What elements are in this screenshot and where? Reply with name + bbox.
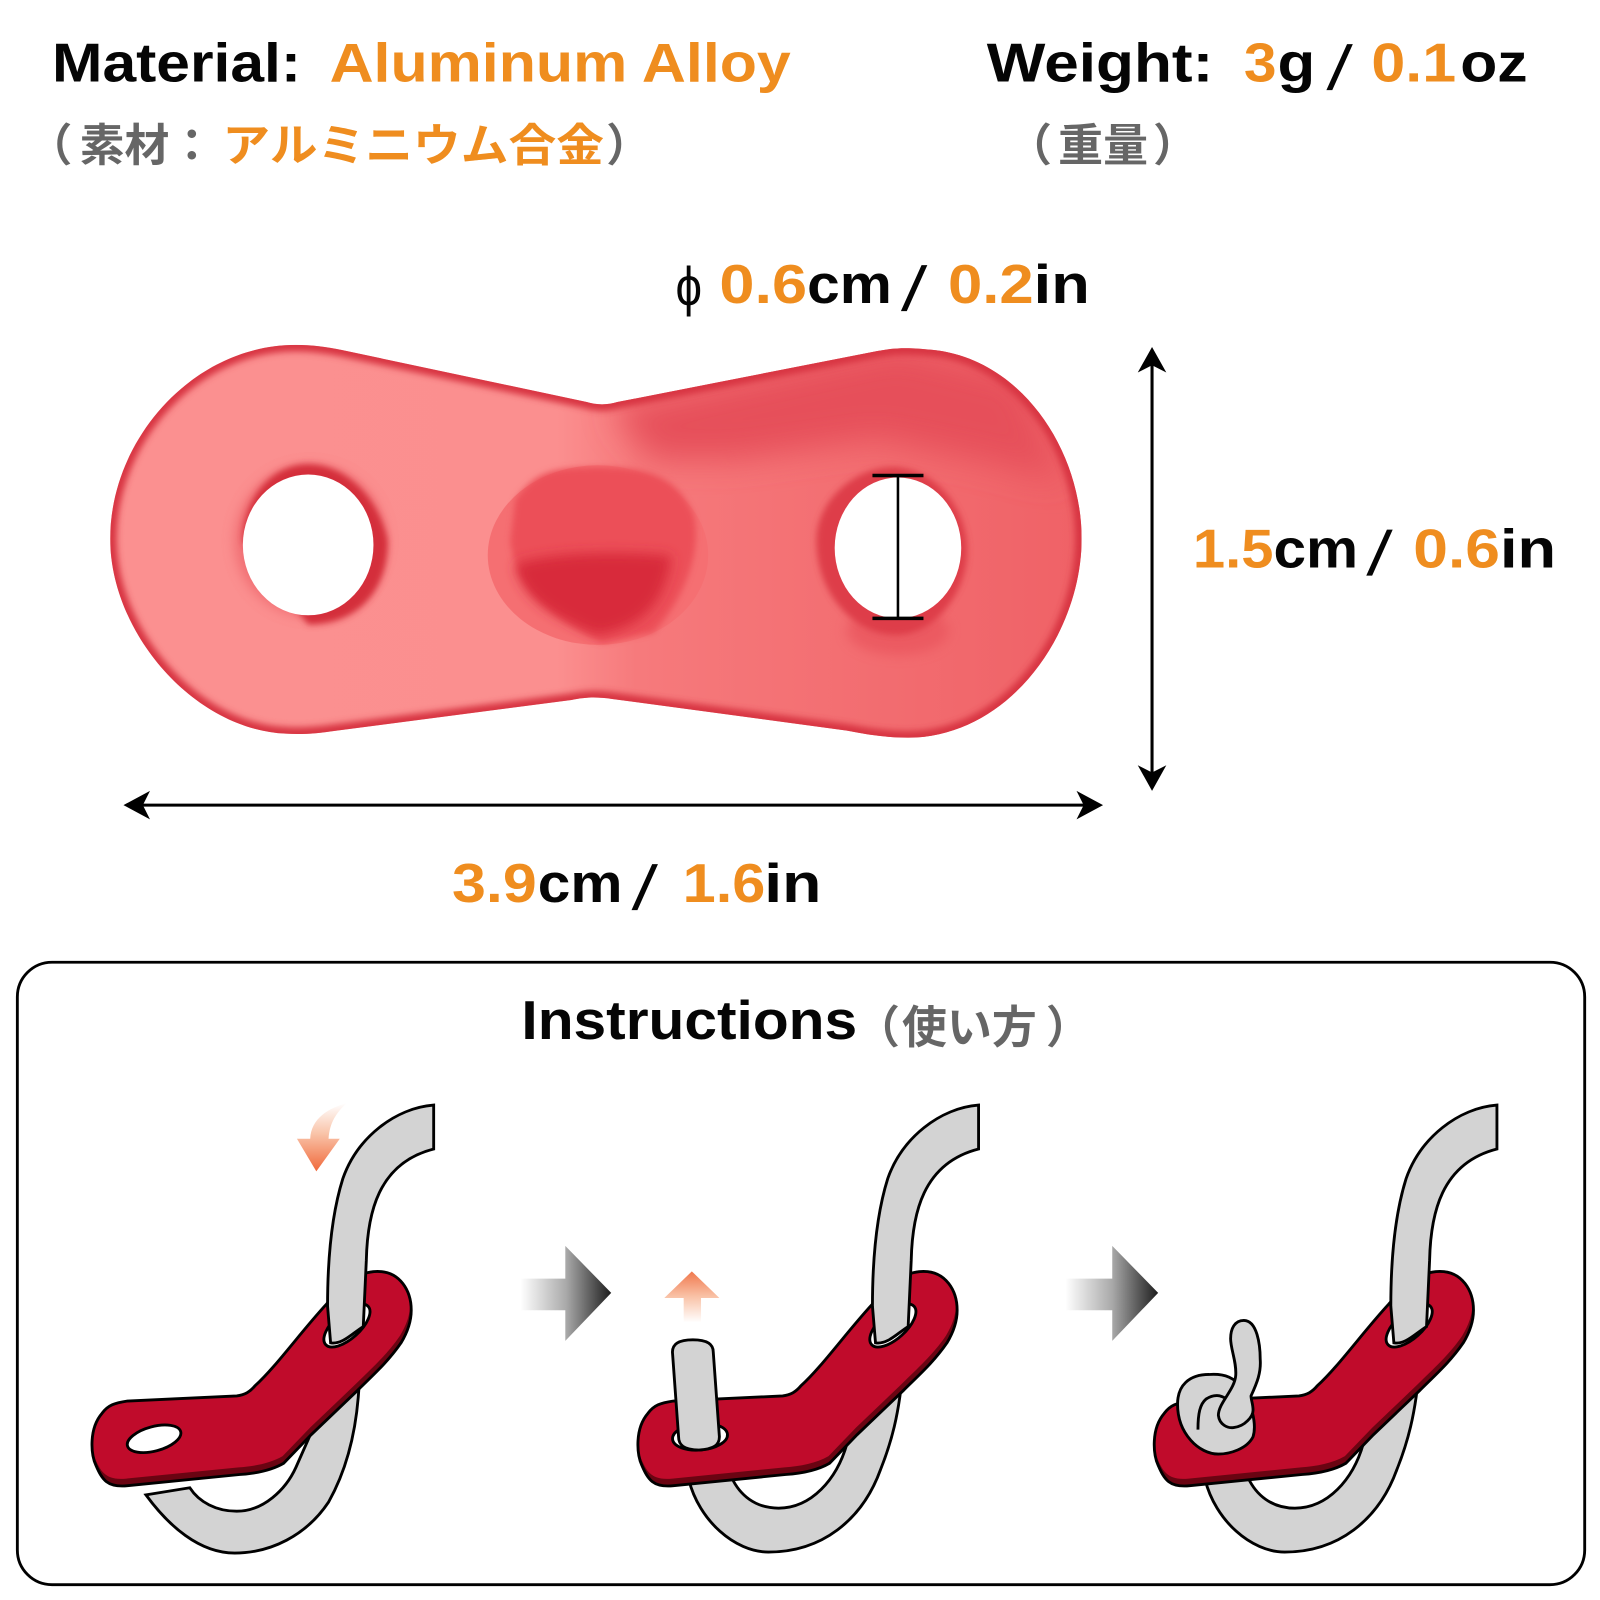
heading: material: [52, 32, 791, 94]
japanese label: material: [28, 120, 651, 171]
height arrow: [1138, 347, 1166, 791]
height label: 0.6: [1413, 517, 1500, 579]
height label: in: [1500, 517, 1556, 579]
instructions heading: [521, 989, 1091, 1053]
orange up arrow: [664, 1271, 719, 1322]
japanese label: material: （: [28, 120, 72, 171]
instructions heading: 使い方: [902, 1002, 1037, 1053]
height label: [1193, 517, 1556, 588]
orange down arrow: [297, 1103, 347, 1171]
heading: weight: 0.1: [1371, 32, 1456, 94]
hole diameter label: in: [1034, 253, 1090, 315]
grey arrow 1: [520, 1246, 611, 1341]
japanese label: weight: （: [1007, 120, 1052, 171]
right hole: [816, 467, 967, 635]
japanese label: weight: 重量: [1058, 120, 1148, 171]
width label: 3.9: [452, 852, 537, 914]
hole diameter label: [676, 253, 1090, 324]
width label: cm: [538, 852, 622, 914]
hole diameter label: cm: [807, 253, 892, 315]
heading: weight: Weight:: [987, 32, 1213, 94]
heading: weight: oz: [1460, 32, 1528, 94]
product photo: red aluminum tensioner: [102, 337, 1092, 745]
hole diameter label: 0.2: [948, 253, 1034, 315]
heading: weight: /: [1325, 34, 1355, 103]
instructions heading: ）: [1046, 1002, 1091, 1053]
center dimple: [488, 465, 708, 645]
instructions heading: Instructions: [521, 989, 857, 1051]
width label: /: [630, 855, 660, 923]
dark upper right shading: [612, 347, 1061, 480]
width label: [452, 852, 821, 923]
japanese label: weight: [1007, 120, 1198, 171]
japanese label: material: ：: [169, 120, 214, 171]
japanese label: material: 素材: [80, 120, 169, 171]
height label: cm: [1273, 517, 1358, 579]
hole diameter label: /: [899, 256, 929, 324]
step 2 illustration: [637, 1105, 979, 1552]
japanese label: weight: ）: [1153, 120, 1198, 171]
japanese label: material: アルミニウム合金: [222, 120, 604, 171]
step 1 illustration: [91, 1105, 434, 1553]
heading: weight: 3: [1244, 32, 1277, 94]
heading: weight: g: [1278, 32, 1315, 94]
rim: [110, 345, 1082, 738]
heading: material: Material:: [52, 32, 301, 94]
width label: 1.6: [683, 852, 765, 914]
knot: [1178, 1320, 1260, 1454]
height label: 1.5: [1193, 517, 1273, 579]
instructions heading: （: [855, 1002, 900, 1053]
hole diameter label: 0.6: [719, 253, 807, 315]
heading: weight: [987, 32, 1528, 103]
heading: material: Aluminum Alloy: [330, 32, 791, 94]
panel: instructions: [17, 962, 1585, 1585]
grey arrow 2: [1065, 1246, 1158, 1341]
width arrow: [123, 791, 1103, 819]
hole diameter marker: [872, 476, 923, 618]
hole diameter label: ϕ: [676, 255, 702, 317]
left hole: [235, 464, 388, 624]
step 3 illustration: [1153, 1105, 1497, 1552]
height label: /: [1365, 520, 1395, 588]
japanese label: material: ）: [606, 120, 651, 171]
width label: in: [764, 852, 821, 914]
